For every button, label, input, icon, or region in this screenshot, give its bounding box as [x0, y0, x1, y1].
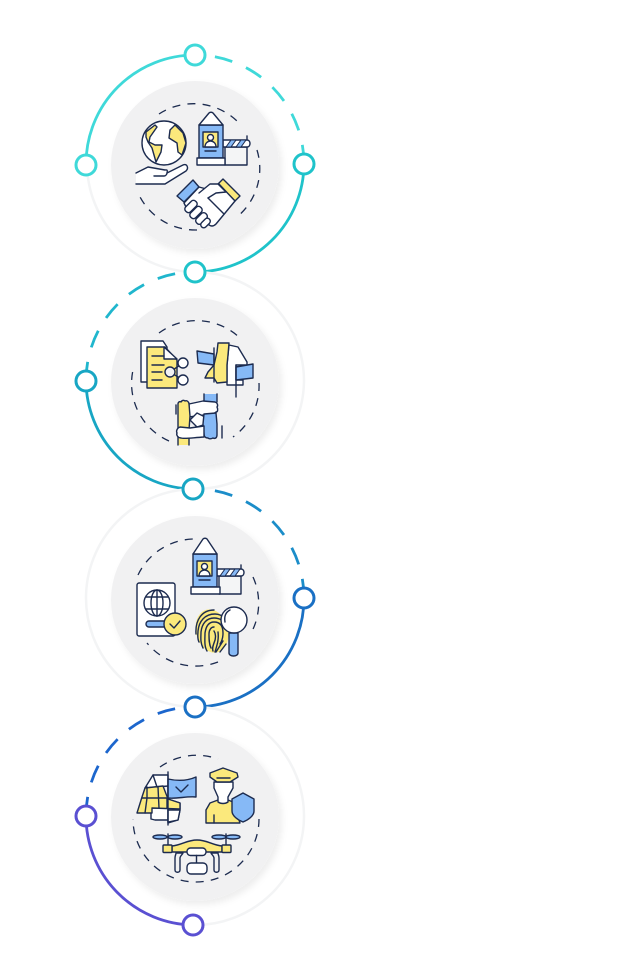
step 1 panel	[76, 45, 314, 272]
step 4 dashed arc	[86, 709, 175, 816]
node top	[185, 45, 205, 65]
step 1 faint ring	[87, 164, 195, 272]
icon: globe in hand	[136, 121, 187, 184]
node bottom	[183, 915, 203, 935]
step 3 solid arc	[195, 598, 304, 707]
step 2 disc	[111, 298, 279, 466]
node left	[76, 155, 96, 175]
step 2 faint ring	[195, 272, 304, 489]
icon: passport	[137, 583, 186, 636]
icon: map with flag	[137, 772, 196, 825]
step 2 dashed arc	[86, 274, 175, 381]
icon: handshake	[177, 179, 240, 229]
node top	[185, 697, 205, 717]
step 3 faint ring	[86, 489, 195, 707]
step 4 dashed circle	[133, 755, 259, 882]
icon: documents sharing	[141, 341, 188, 388]
step 1 solid arc right	[195, 164, 304, 272]
icon: border officer with shield	[206, 768, 254, 823]
step 3 dashed arc	[215, 491, 304, 598]
node top	[183, 479, 203, 499]
icon: drone	[153, 834, 240, 874]
icon: checkpoint booth	[191, 538, 244, 594]
icon: fingerprint under magnifier	[191, 606, 247, 656]
step 4 faint ring	[193, 707, 304, 925]
node right	[294, 154, 314, 174]
step 3 dashed circle	[138, 539, 259, 666]
step 1 disc	[111, 81, 279, 249]
node left	[76, 806, 96, 826]
step 4 panel	[76, 697, 304, 935]
step 4 disc	[111, 733, 279, 901]
step 1 dashed circle	[138, 104, 260, 230]
step 2 dashed circle	[132, 321, 259, 441]
step 3 panel	[86, 479, 314, 707]
step 1 dashed arc	[215, 57, 304, 164]
step 4 solid arc	[86, 816, 193, 925]
node top	[185, 262, 205, 282]
node right	[294, 588, 314, 608]
step 3 disc	[111, 516, 279, 684]
step 2 panel	[76, 262, 304, 489]
icon: hands square	[176, 394, 222, 445]
step 1 solid arc left	[86, 55, 195, 164]
node left	[76, 371, 96, 391]
icon: checkpoint booth	[197, 112, 250, 165]
step 2 solid arc	[86, 381, 193, 489]
icon: joined flags	[197, 343, 253, 397]
